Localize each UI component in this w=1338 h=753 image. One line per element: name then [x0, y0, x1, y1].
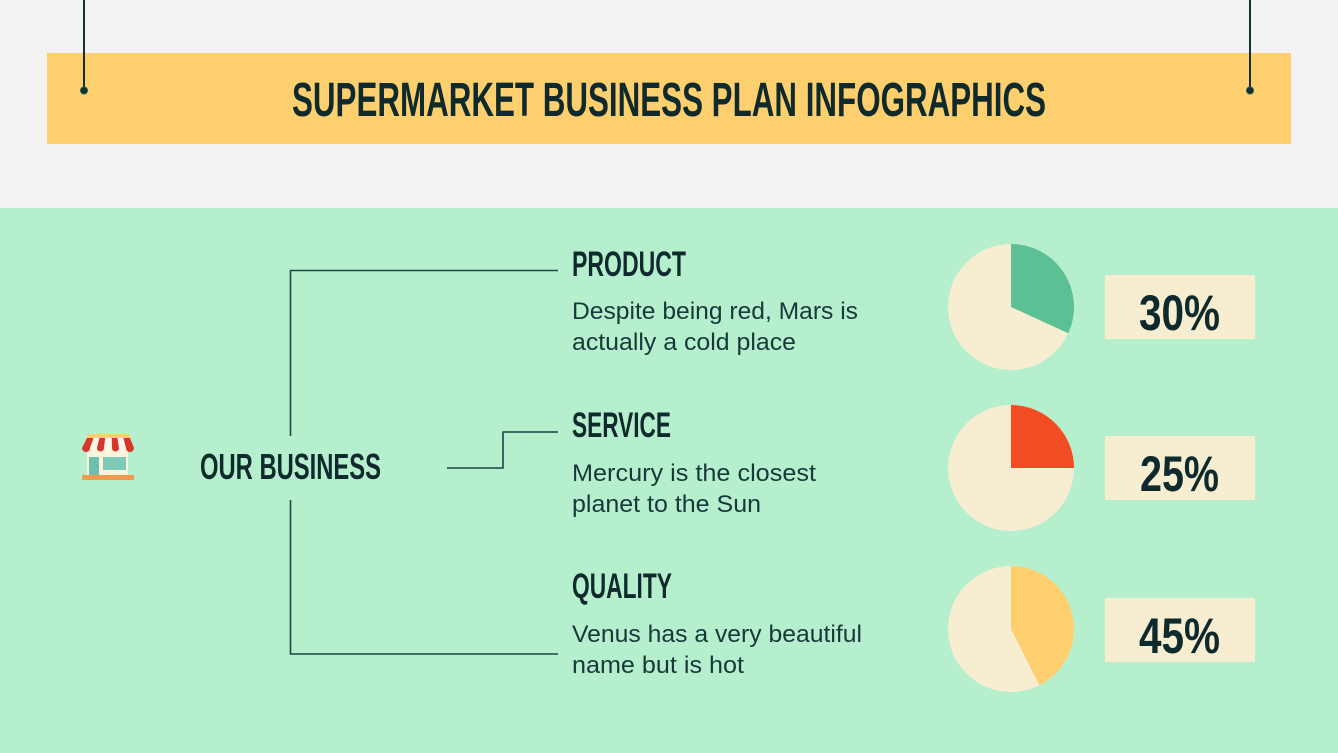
- text: product description: actually a cold place: [572, 329, 796, 356]
- connector: service: [447, 432, 558, 468]
- pie chart: 25%: [948, 405, 1074, 531]
- block: quality: [572, 567, 862, 679]
- value: 25%: 25%: [1140, 446, 1219, 502]
- heading: quality: QUALITY: [572, 567, 672, 606]
- text: quality description: Venus has a very beautiful: [572, 621, 862, 648]
- text: quality description: [572, 621, 862, 679]
- block: service: [572, 406, 816, 518]
- icon: left hanging pin: [80, 0, 88, 94]
- text: product description: [572, 298, 858, 356]
- value: 30%: [1105, 275, 1255, 341]
- block: product: [572, 245, 858, 356]
- value: 25%: [1105, 436, 1255, 502]
- value: 30%: 30%: [1139, 285, 1220, 341]
- value: 45%: [1105, 598, 1255, 664]
- text: product description: Despite being red, Mars is: [572, 298, 858, 325]
- text: service description: [572, 460, 816, 518]
- pie chart: 30%: [948, 244, 1074, 370]
- title banner: [47, 53, 1291, 144]
- connector: product: [290, 270, 558, 436]
- heading: service: SERVICE: [572, 406, 671, 445]
- text: service description: planet to the Sun: [572, 491, 761, 518]
- pie chart: 45%: [948, 566, 1074, 692]
- icon: shop: [82, 434, 134, 480]
- connector: quality: [290, 500, 558, 654]
- panel: green background: [0, 208, 1338, 753]
- heading: product: PRODUCT: [572, 245, 686, 284]
- text: quality description: name but is hot: [572, 652, 744, 679]
- value: 45%: 45%: [1139, 608, 1220, 664]
- text: service description: Mercury is the closest: [572, 460, 816, 487]
- icon: right hanging pin: [1246, 0, 1254, 94]
- heading: our business: OUR BUSINESS: [200, 446, 381, 487]
